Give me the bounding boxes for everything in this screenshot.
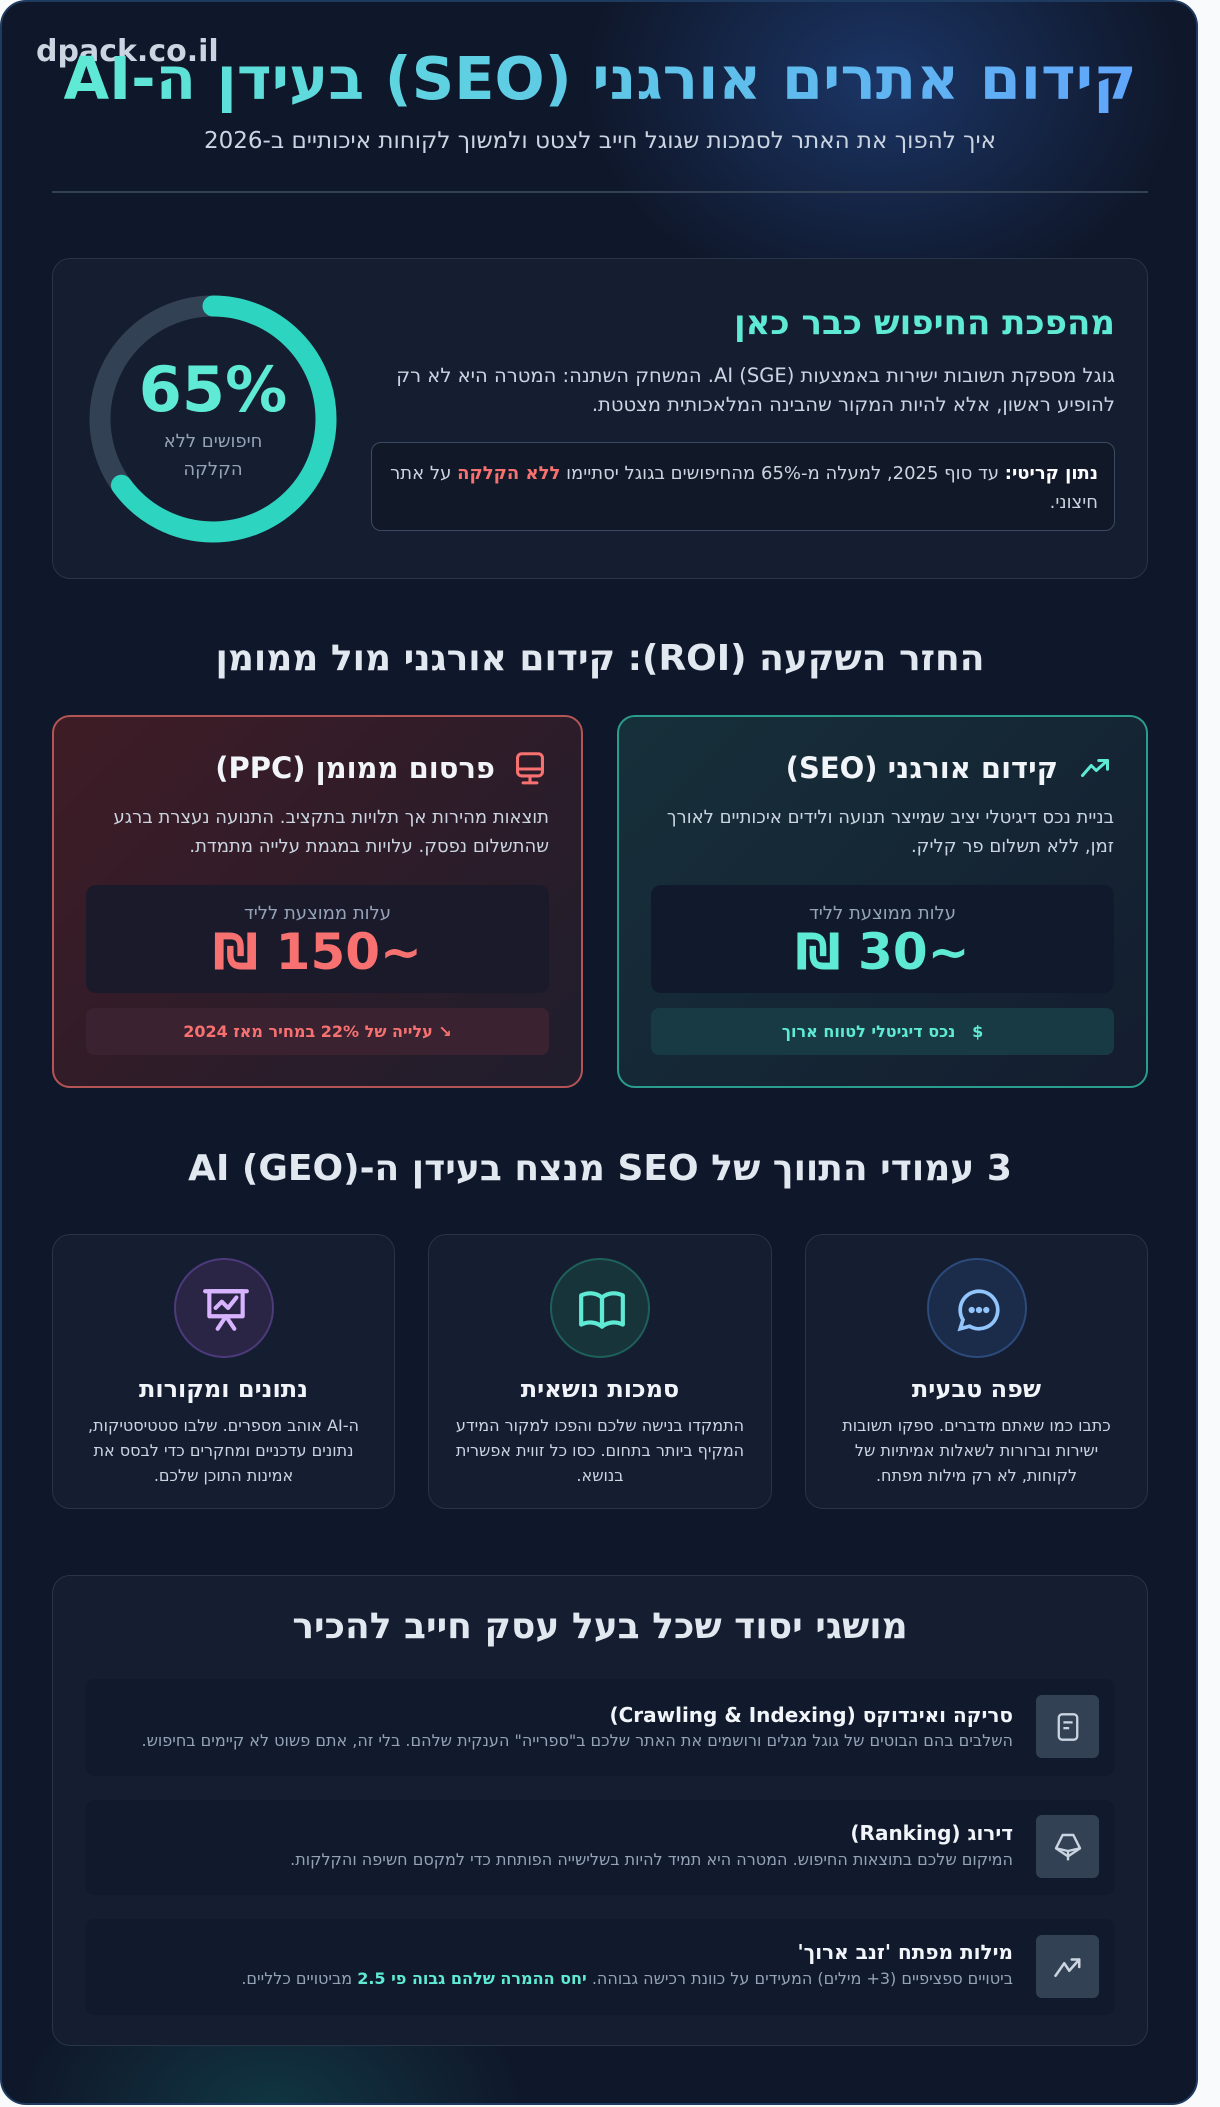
- item: long tail: [85, 1919, 1115, 2015]
- heading: ROI: החזר השקעה (ROI): קידום אורגני מול ממומן: [215, 638, 984, 679]
- item: ranking: דירוג (Ranking): [850, 1821, 1013, 1845]
- price box: [651, 885, 1114, 993]
- title: פרסום ממומן (PPC): [215, 751, 495, 785]
- heading: מושגי יסוד שכל בעל עסק חייב להכיר: [292, 1606, 908, 1647]
- badge: $ נכס דיגיטלי לטווח ארוך: [782, 1022, 983, 1041]
- heading: מהפכת החיפוש כבר כאן: [734, 303, 1115, 343]
- item: ranking: [85, 1800, 1115, 1895]
- icon: diamond: [1036, 1815, 1099, 1878]
- title: שפה טבעית: [912, 1375, 1041, 1403]
- text: בניית נכס דיגיטלי יציב שמייצר תנועה ולידים איכותיים לאורך זמן, ללא תשלום פר קליק.: [667, 807, 1114, 857]
- chart: donut 65%: 65%: [139, 353, 287, 426]
- callout: [371, 442, 1115, 531]
- title: נתונים ומקורות: [139, 1375, 308, 1403]
- price box: עלות ממוצעת לליד: [809, 903, 956, 924]
- title: קידום אתרים אורגני (SEO) בעידן ה-AI: [63, 44, 1137, 113]
- watermark: dpack.co.il: [36, 34, 219, 69]
- price box: ₪ 150~: [213, 923, 422, 981]
- price box: עלות ממוצעת לליד: [244, 903, 391, 924]
- item: ranking: המיקום שלכם בתוצאות החיפוש. המטרה היא תמיד להיות בשלישייה הפותחת כדי למקסם חשיפה והקלקות.: [290, 1850, 1013, 1869]
- chart: donut 65%: חיפושים ללא הקלקה: [164, 431, 262, 480]
- icon: document: [1036, 1695, 1099, 1758]
- callout: נתון קריטי: עד סוף 2025, למעלה מ-65% מהחיפושים בגוגל יסתיימו ללא הקלקה על אתר חיצוני.: [390, 463, 1098, 513]
- panel: PPC card: [52, 715, 583, 1088]
- icon: trend: [1036, 1935, 1099, 1998]
- panel: search revolution: [52, 258, 1148, 579]
- price box: ₪ 30~: [795, 923, 970, 981]
- item: crawling: [85, 1679, 1115, 1776]
- text block: גוגל מספקת תשובות ישירות באמצעות AI (SGE). המשחק השתנה: המטרה היא לא רק להופיע ראשון, אלא להיות המקור שהבינה המלאכותית מצטטת.: [396, 364, 1115, 416]
- panel: pillar natural language: [805, 1234, 1148, 1509]
- icon: book: [550, 1258, 650, 1358]
- text: ה-AI אוהב מספרים. שלבו סטטיסטיקות, נתונים עדכניים ומחקרים כדי לבסס את אמינות התוכן שלכם.: [88, 1416, 359, 1485]
- panel: pillar data: [52, 1234, 395, 1509]
- badge: ↘ עלייה של 22% במחיר מאז 2024: [183, 1022, 452, 1041]
- price box: [86, 885, 549, 993]
- panel: pillar authority: [428, 1234, 772, 1509]
- text: התמקדו בנישה שלכם והפכו למקור המידע המקיף ביותר בתחום. כסו כל זווית אפשרית בנושא.: [456, 1416, 744, 1485]
- icon: chat: [927, 1258, 1027, 1358]
- item: long tail: מילות מפתח 'זנב ארוך': [798, 1940, 1013, 1964]
- badge: [651, 1008, 1114, 1055]
- badge: [86, 1008, 549, 1055]
- panel: glossary: [52, 1575, 1148, 2046]
- item: crawling: השלבים בהם הבוטים של גוגל מגלים ורושמים את האתר שלכם ב"ספרייה" הענקית שלהם. בלי זה, אתם פשוט לא קיימים בחיפוש.: [142, 1731, 1013, 1750]
- title: סמכות נושאית: [521, 1375, 679, 1403]
- icon: trend up: [1080, 758, 1110, 778]
- text: תוצאות מהירות אך תלויות בתקציב. התנועה נעצרת ברגע שהתשלום נפסק. עלויות במגמת עלייה מתמדת.: [113, 807, 549, 857]
- title: קידום אורגני (SEO): [786, 751, 1058, 785]
- text: כתבו כמו שאתם מדברים. ספקו תשובות ישירות וברורות לשאלות אמיתיות של לקוחות, לא רק מילות מפתח.: [842, 1416, 1111, 1485]
- item: long tail: ביטויים ספציפיים (3+ מילים) המעידים על כוונת רכישה גבוהה. יחס ההמרה שלהם גבוה פי 2.5 מביטויים כלליים.: [241, 1969, 1013, 1988]
- icon: presentation: [174, 1258, 274, 1358]
- chart: donut 65%: [90, 296, 336, 542]
- item: crawling: סריקה ואינדוקס (Crawling & Indexing): [609, 1703, 1013, 1727]
- heading: pillars: 3 עמודי התווך של SEO מנצח בעידן ה-AI (GEO): [188, 1148, 1012, 1189]
- panel: SEO card: [617, 715, 1148, 1088]
- icon: monitor: [516, 752, 544, 784]
- subtitle: איך להפוך את האתר לסמכות שגוגל חייב לצטט ולמשוך לקוחות איכותיים ב-2026: [204, 128, 996, 154]
